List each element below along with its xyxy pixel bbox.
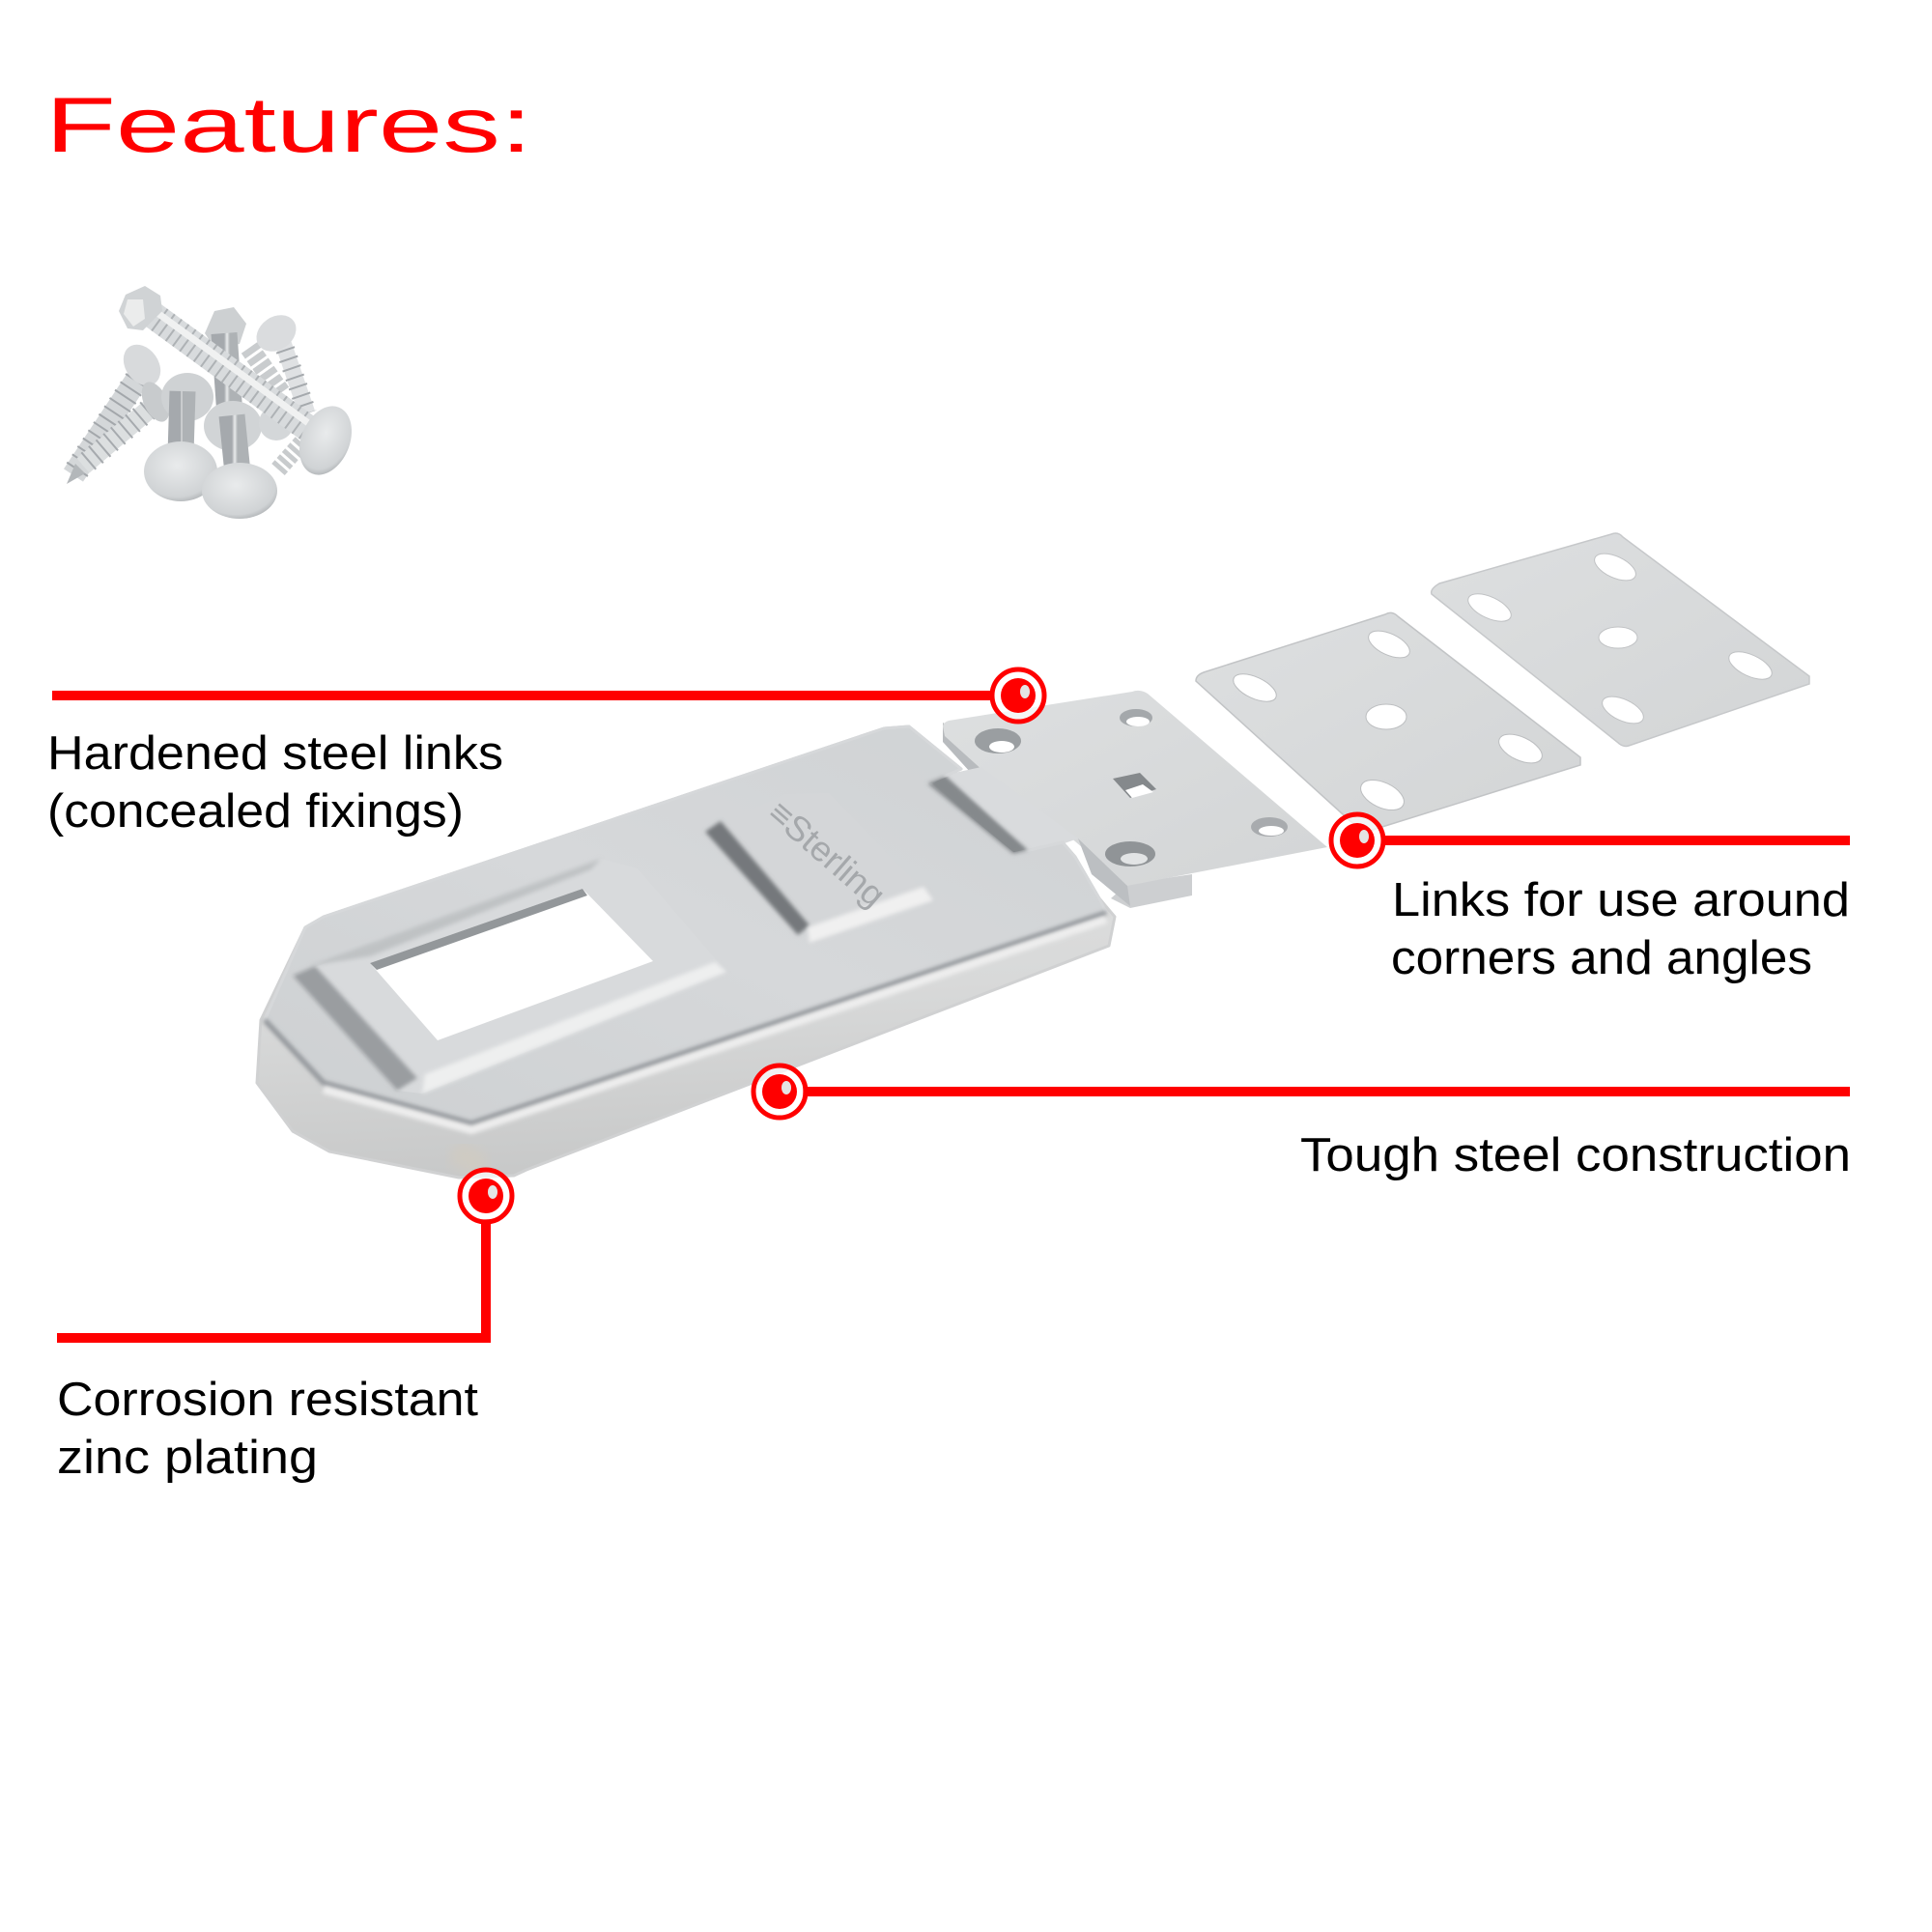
- label text: [57, 1374, 478, 1484]
- rear bolt with nut and washer: [202, 307, 294, 519]
- marker: [753, 1065, 806, 1118]
- left wood screws: [67, 337, 175, 484]
- callout: hardened steel links: [47, 669, 1044, 838]
- callout: tough steel construction: [753, 1065, 1851, 1181]
- holes: [1464, 548, 1776, 729]
- icon: screws and bolts fixing set: [67, 286, 361, 519]
- panel: third link plate: [1432, 533, 1809, 746]
- leader line: [803, 1087, 1850, 1096]
- leader line: [1381, 836, 1850, 845]
- leader line: [57, 1219, 486, 1338]
- leader line: [52, 691, 994, 700]
- callout: corrosion resistant zinc plating: [57, 1170, 512, 1484]
- label text: [1391, 874, 1850, 984]
- panel: hasp body: [257, 726, 1115, 1178]
- label text: Hardened steel links: [47, 727, 503, 780]
- holes: [975, 709, 1288, 867]
- callout: links for corners: [1331, 814, 1850, 984]
- stamped logo text: ≡Sterling: [761, 792, 894, 915]
- stamped logo panel: [705, 793, 933, 944]
- right wood screws: [249, 307, 307, 469]
- label text: Tough steel construction: [1300, 1129, 1851, 1181]
- panel: second link plate: [1196, 612, 1580, 832]
- label text: corners and angles: [1391, 932, 1812, 984]
- title: Features:: [45, 82, 532, 169]
- marker: [460, 1170, 512, 1222]
- raised window frame: [293, 859, 726, 1094]
- top face: [265, 726, 1106, 1123]
- label text: Corrosion resistant: [57, 1374, 478, 1426]
- fold shading on the lower edge: [265, 913, 1106, 1123]
- label text: (concealed fixings): [47, 785, 464, 838]
- marker: [992, 669, 1044, 722]
- window opening: [370, 889, 653, 1040]
- centre bolt with washer: [144, 301, 217, 501]
- holes: [1230, 625, 1547, 816]
- panel: hinged plate with concealed fixings: [927, 691, 1327, 908]
- label text: Links for use around: [1392, 874, 1850, 926]
- label text: [47, 727, 503, 838]
- long diagonal bolt with nut and dome: [119, 286, 361, 483]
- hinge shadow: [927, 777, 1028, 854]
- marker: [1331, 814, 1383, 867]
- label text: zinc plating: [57, 1432, 318, 1484]
- side band: [257, 726, 1115, 1178]
